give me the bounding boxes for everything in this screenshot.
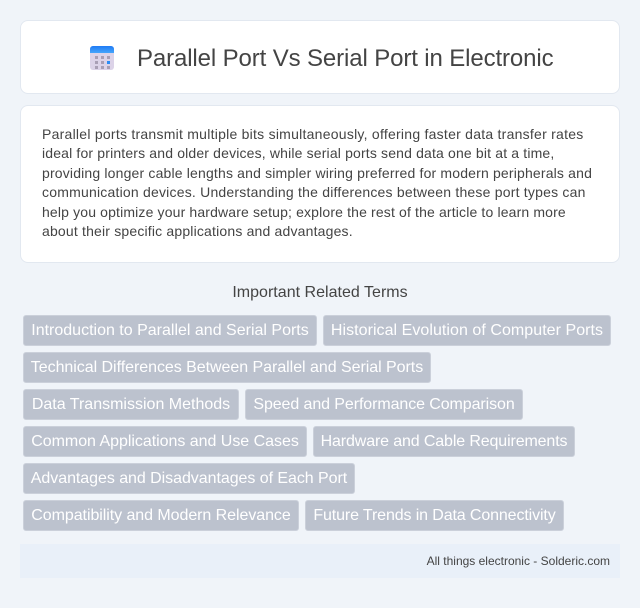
- tag: Compatibility and Modern Relevance: [31, 507, 291, 524]
- intro text: communication devices. Understanding the differences between these port types can: [42, 184, 586, 200]
- section heading: Important Related Terms: [232, 284, 408, 301]
- tag: [313, 426, 575, 457]
- tag: [23, 500, 299, 531]
- tag: Hardware and Cable Requirements: [321, 433, 567, 450]
- tag: Common Applications and Use Cases: [31, 433, 299, 450]
- tag: Technical Differences Between Parallel and Serial Ports: [31, 359, 423, 376]
- tag: Advantages and Disadvantages of Each Port: [31, 470, 347, 487]
- tag: [23, 389, 239, 420]
- intro text: [42, 126, 592, 239]
- tag: [23, 463, 355, 494]
- header card: [20, 20, 620, 94]
- tag: [245, 389, 523, 420]
- tag: Data Transmission Methods: [32, 396, 230, 413]
- tag: [23, 352, 431, 383]
- intro text: providing longer cable lengths and simpler wiring preferred for modern peripherals and: [42, 165, 592, 181]
- related terms tags: [23, 315, 611, 531]
- intro text: help you optimize your hardware setup; explore the rest of the article to learn more: [42, 204, 566, 220]
- intro text: Parallel ports transmit multiple bits simultaneously, offering faster data transfer rates: [42, 126, 584, 142]
- tag: [323, 315, 611, 346]
- footer: All things electronic - Solderic.com: [427, 554, 610, 568]
- tag: [23, 315, 317, 346]
- tag: Introduction to Parallel and Serial Ports: [31, 322, 309, 339]
- tag: [305, 500, 564, 531]
- footer: [20, 544, 620, 578]
- intro text: about their specific applications and advantages.: [42, 223, 353, 239]
- tag: [23, 426, 307, 457]
- title: Parallel Port Vs Serial Port in Electronic: [137, 45, 553, 72]
- intro panel: [20, 105, 620, 263]
- tag: Historical Evolution of Computer Ports: [331, 322, 603, 339]
- intro text: ideal for printers and older devices, while serial ports send data one bit at a time,: [42, 145, 554, 161]
- tag: Speed and Performance Comparison: [253, 396, 515, 413]
- icon: calendar: [90, 46, 114, 70]
- tag: Future Trends in Data Connectivity: [313, 507, 556, 524]
